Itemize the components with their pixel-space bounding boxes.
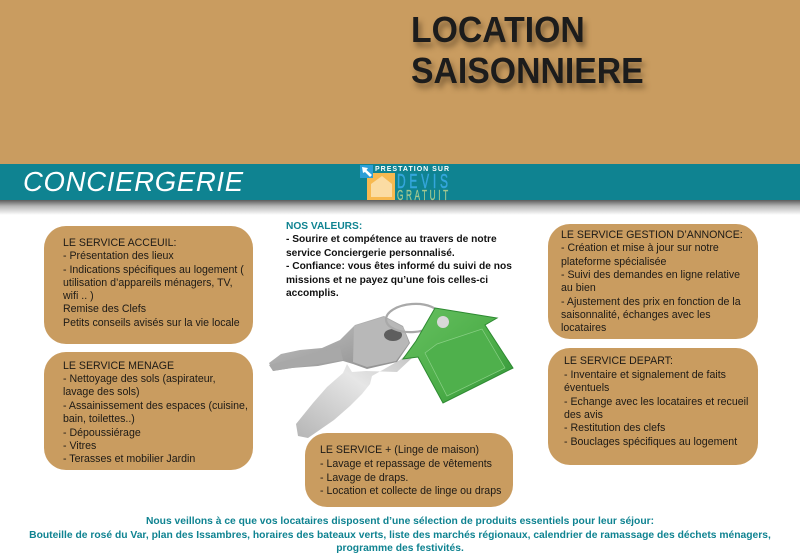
top tan background bbox=[0, 0, 800, 164]
text block: nos valeurs: - Confiance: vous êtes informé du suivi de nos bbox=[286, 261, 512, 272]
text block: nos valeurs: accomplis. bbox=[286, 288, 339, 299]
panel: service menage: - Dépoussiérage bbox=[63, 427, 141, 439]
panel: service depart: - Inventaire et signalement de faits bbox=[564, 369, 726, 381]
panel: service gestion d'annonce bbox=[548, 224, 758, 339]
panel: service menage: - Terasses et mobilier Jardin bbox=[63, 453, 195, 465]
teal banner bbox=[0, 164, 800, 200]
image: keys with green house key ring bbox=[269, 302, 514, 438]
panel: service depart: - Restitution des clefs bbox=[564, 422, 665, 434]
text block: nos valeurs: - Sourire et compétence au travers de notre bbox=[286, 234, 497, 245]
panel: service depart: - Bouclages spécifiques au logement bbox=[564, 436, 737, 448]
panel: service gestion d'annonce: locataires bbox=[561, 322, 606, 334]
panel: service accueil: - Présentation des lieux bbox=[63, 250, 174, 262]
footer note: programme des festivités. bbox=[336, 543, 464, 554]
title: LOCATION bbox=[411, 9, 585, 50]
text block: nos valeurs bbox=[286, 221, 512, 299]
panel: service gestion d'annonce: - Ajustement des prix en fonction de la bbox=[561, 296, 741, 308]
panel: service plus: LE SERVICE + (Linge de maison) bbox=[320, 444, 479, 456]
panel: service plus: - Lavage de draps. bbox=[320, 472, 408, 484]
panel: service menage: bain, toilettes..) bbox=[63, 413, 135, 425]
footer note: Nous veillons à ce que vos locataires disposent d’une sélection de produits essentiels pour leur séjour: bbox=[146, 516, 654, 527]
panel: service depart: LE SERVICE DEPART: bbox=[564, 355, 673, 367]
panel: service menage bbox=[44, 352, 253, 470]
panel: service plus bbox=[305, 433, 513, 507]
panel: service menage: - Assainissement des espaces (cuisine, bbox=[63, 400, 248, 412]
upper key bbox=[269, 316, 410, 371]
panel: service accueil: LE SERVICE ACCEUIL: bbox=[63, 237, 176, 249]
title bbox=[411, 9, 648, 92]
panel: service accueil: Petits conseils avisés sur la vie locale bbox=[63, 317, 240, 329]
panel: service gestion d'annonce: saisonnalité, échanges avec les bbox=[561, 309, 711, 321]
panel: service gestion d'annonce: - Création et mise à jour sur notre bbox=[561, 242, 719, 254]
footer note: Bouteille de rosé du Var, plan des Issambres, horaires des bateaux verts, liste des marchés régionaux, calendrier de ramassage des déchets ménagers, bbox=[29, 530, 771, 541]
panel: service menage: - Nettoyage des sols (aspirateur, bbox=[63, 373, 216, 385]
panel: service plus: - Location et collecte de linge ou draps bbox=[320, 485, 501, 497]
badge: prestation sur devis gratuit: DEVIS bbox=[397, 171, 448, 193]
panel: service depart bbox=[548, 348, 758, 465]
panel: service gestion d'annonce: - Suivi des demandes en ligne relative bbox=[561, 269, 740, 281]
panel: service menage: lavage des sols) bbox=[63, 386, 140, 398]
panel: service depart: - Echange avec les locataires et recueil bbox=[564, 396, 748, 408]
panel: service accueil bbox=[44, 226, 253, 344]
panel: service menage: LE SERVICE MENAGE bbox=[63, 360, 174, 372]
text block: nos valeurs: service Conciergerie personnalisé. bbox=[286, 248, 455, 259]
text block: nos valeurs: missions et ne payez qu’une fois celles-ci bbox=[286, 275, 488, 286]
panel: service depart: des avis bbox=[564, 409, 603, 421]
footer note bbox=[29, 516, 771, 554]
panel: service gestion d'annonce: LE SERVICE GESTION D’ANNONCE: bbox=[561, 229, 743, 241]
panel: service accueil: Remise des Clefs bbox=[63, 303, 146, 315]
banner shadow bbox=[0, 200, 800, 215]
key ring bbox=[385, 302, 441, 334]
lower key bbox=[296, 353, 412, 438]
panel: service accueil: wifi .. ) bbox=[63, 290, 94, 302]
title: SAISONNIERE bbox=[411, 50, 644, 91]
badge: prestation sur devis gratuit: PRESTATION SUR bbox=[375, 166, 449, 173]
panel: service accueil: - Indications spécifiques au logement ( bbox=[63, 264, 244, 276]
text block: nos valeurs: NOS VALEURS: bbox=[286, 221, 362, 232]
banner heading: conciergerie: CONCIERGERIE bbox=[23, 166, 244, 197]
panel: service menage: - Vitres bbox=[63, 440, 96, 452]
panel: service depart: éventuels bbox=[564, 382, 609, 394]
panel: service gestion d'annonce: au bien bbox=[561, 282, 596, 294]
green house tag bbox=[403, 308, 513, 403]
panel: service plus: - Lavage et repassage de vêtements bbox=[320, 458, 492, 470]
panel: service gestion d'annonce: plateforme spécialisée bbox=[561, 256, 666, 268]
badge: prestation sur devis gratuit bbox=[360, 165, 449, 203]
panel: service accueil: utilisation d’appareils ménagers, TV, bbox=[63, 277, 233, 289]
